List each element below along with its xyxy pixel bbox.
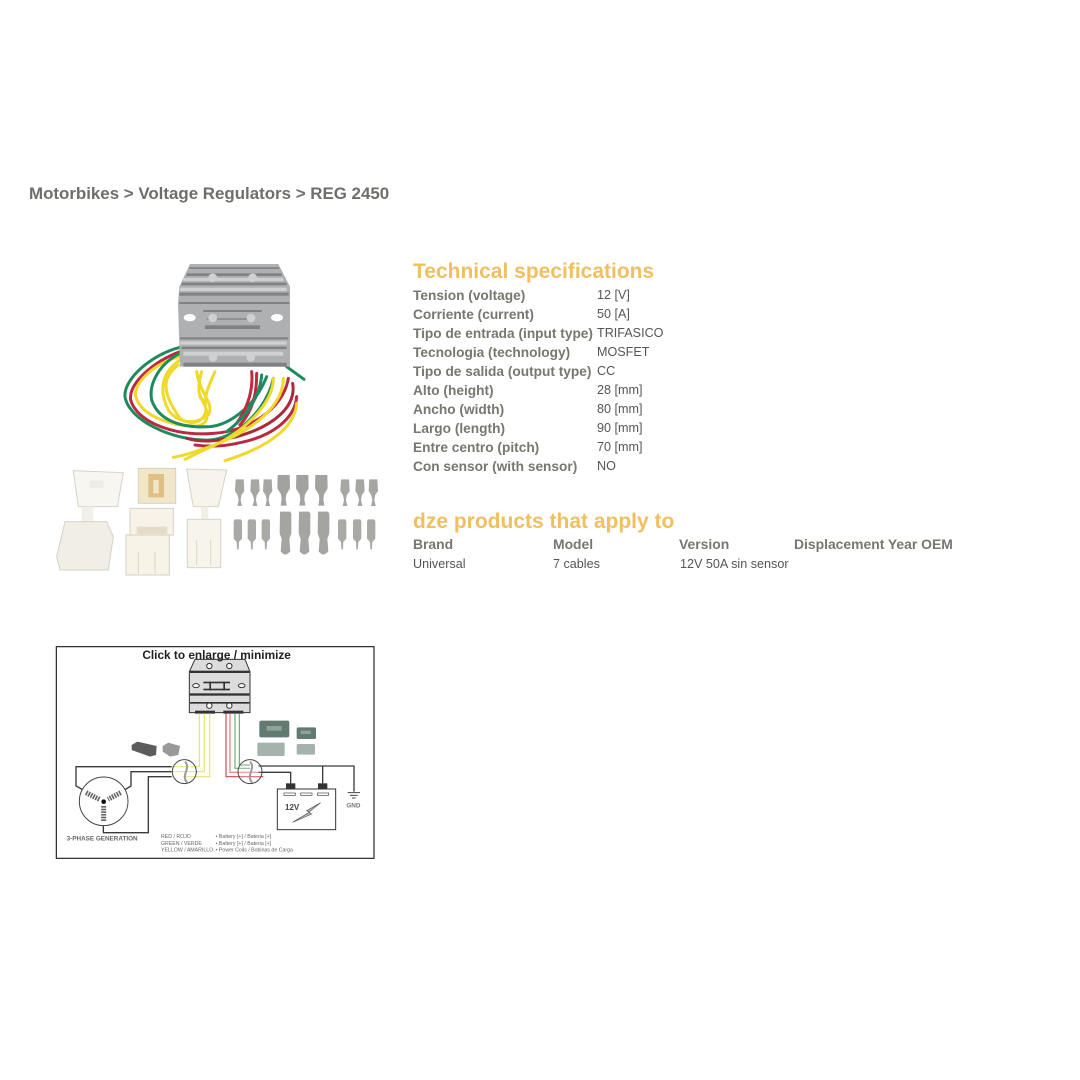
spec table <box>413 288 663 474</box>
connector icons <box>132 721 316 757</box>
wire colour legend: YELLOW / AMARILLO <box>161 848 213 854</box>
regulator body <box>178 264 290 367</box>
ground symbol <box>346 793 361 810</box>
spec: pitch: 70 [mm] <box>597 440 642 454</box>
breadcrumb heading: Motorbikes > Voltage Regulators > REG 2450 <box>29 184 389 203</box>
spec: voltage <box>413 288 630 303</box>
table data row: 7 cables <box>553 557 600 571</box>
table data row: 12V 50A sin sensor <box>680 557 789 571</box>
spec: input type: TRIFASICO <box>597 326 663 340</box>
table header row <box>413 536 953 552</box>
wire colour legend <box>161 834 293 854</box>
heading: technical specifications: Technical specifications <box>413 260 654 283</box>
spec: voltage: Tension (voltage) <box>413 288 525 303</box>
spec: height <box>413 383 642 398</box>
wiring diagram panel <box>56 646 375 859</box>
spec: output type: Tipo de salida (output type) <box>413 364 591 379</box>
spec: length: Largo (length) <box>413 421 505 436</box>
spec: technology: MOSFET <box>597 345 649 359</box>
wire colour legend: • Power Coils / Bobinas de Carga <box>216 848 293 854</box>
table header row: Model <box>553 536 593 552</box>
wire bundle circles <box>172 760 262 784</box>
table header row: Brand <box>413 536 453 552</box>
wire colour legend: GREEN / VERDE <box>161 841 202 847</box>
table header row: Version <box>679 536 729 552</box>
spec: current: 50 [A] <box>597 307 630 321</box>
ground, battery and generator wires <box>76 766 354 833</box>
wires <box>125 347 304 461</box>
spec: voltage: 12 [V] <box>597 288 630 302</box>
small regulator drawing <box>189 659 250 714</box>
spec: sensor: Con sensor (with sensor) <box>413 459 577 474</box>
spec: length <box>413 421 642 436</box>
table header row: Displacement Year OEM <box>794 536 953 552</box>
battery: 12V <box>285 803 300 812</box>
spec: sensor: NO <box>597 459 616 473</box>
spec: pitch <box>413 440 642 455</box>
table data row: Universal <box>413 557 466 571</box>
spec: input type: Tipo de entrada (input type) <box>413 326 593 341</box>
metal terminals <box>234 475 378 554</box>
spec: width: Ancho (width) <box>413 402 504 417</box>
spec: width <box>413 402 642 417</box>
three-phase generator <box>79 777 128 826</box>
spec: current: Corriente (current) <box>413 307 534 322</box>
wire colour legend: • Battery [+] / Bateria [+] <box>216 841 272 847</box>
spec: current <box>413 307 630 322</box>
table data row <box>413 557 789 571</box>
spec: width: 80 [mm] <box>597 402 642 416</box>
generator caption: 3-PHASE GENERATION <box>67 836 138 843</box>
spec: output type: CC <box>597 364 615 378</box>
spec: pitch: Entre centro (pitch) <box>413 440 539 455</box>
spec: length: 90 [mm] <box>597 421 642 435</box>
wire colour legend: RED / ROJO <box>161 834 191 840</box>
ground symbol: GND <box>346 803 361 810</box>
plastic connectors <box>57 468 227 575</box>
spec: height: Alto (height) <box>413 383 494 398</box>
spec: height: 28 [mm] <box>597 383 642 397</box>
compatibility table <box>413 536 953 571</box>
product photo: regulator with wires and connectors <box>56 264 378 576</box>
wire colour legend: • Battery [+] / Bateria [+] <box>216 834 272 840</box>
enlarge caption: Click to enlarge / minimize <box>142 648 291 662</box>
frame <box>56 647 374 858</box>
coloured wires <box>170 713 263 777</box>
heading: products that apply to: dze products that apply to <box>413 510 674 533</box>
battery <box>277 783 336 830</box>
spec: technology <box>413 345 650 360</box>
spec: technology: Tecnologia (technology) <box>413 345 570 360</box>
